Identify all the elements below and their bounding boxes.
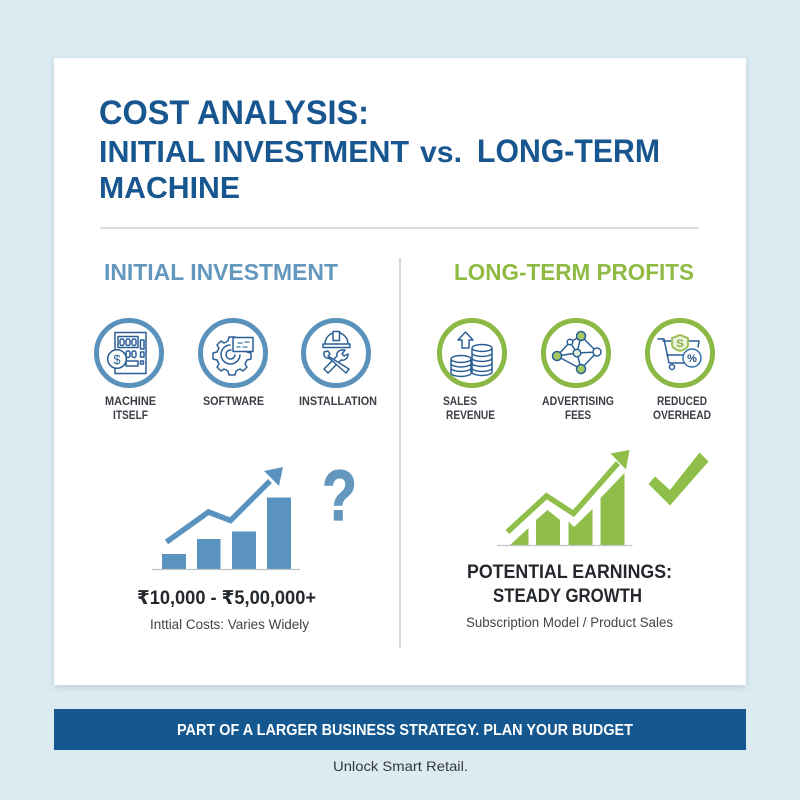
cost range: ₹10,000 - ₹5,00,000+ bbox=[137, 588, 316, 609]
heading: initial investment: INITIAL INVESTMENT bbox=[104, 259, 338, 285]
label: advertising fees: FEES bbox=[565, 410, 591, 422]
label: sales revenue: SALES bbox=[443, 396, 477, 408]
label: machine itself: MACHINE bbox=[105, 396, 156, 408]
earnings note: Subscription Model / Product Sales bbox=[466, 615, 673, 630]
icon: installation bbox=[304, 320, 368, 386]
icon: question mark: ? bbox=[322, 457, 357, 536]
icon: advertising fees bbox=[544, 320, 608, 386]
icon: software bbox=[200, 320, 266, 386]
title: vs. bbox=[420, 136, 462, 169]
potential earnings: STEADY GROWTH bbox=[493, 586, 642, 607]
label: reduced overhead: REDUCED bbox=[657, 396, 707, 408]
icon: check mark bbox=[648, 452, 708, 506]
label: advertising fees: ADVERTISING bbox=[542, 396, 614, 408]
title: LONG-TERM bbox=[477, 133, 660, 169]
title: MACHINE bbox=[99, 170, 240, 205]
title: INITIAL INVESTMENT bbox=[99, 134, 409, 169]
label: installation: INSTALLATION bbox=[299, 396, 377, 408]
icon: reduced overhead: S bbox=[676, 338, 684, 350]
tagline: Unlock Smart Retail. bbox=[333, 758, 468, 774]
title bbox=[99, 94, 660, 205]
heading: long-term profits: LONG-TERM PROFITS bbox=[454, 259, 694, 285]
panel: main card bbox=[54, 58, 746, 685]
title: COST ANALYSIS: bbox=[99, 94, 369, 132]
label: machine itself: ITSELF bbox=[113, 410, 148, 422]
label: reduced overhead: OVERHEAD bbox=[653, 410, 711, 422]
cost note: Inttial Costs: Varies Widely bbox=[150, 617, 309, 632]
chart: rising costs bbox=[152, 467, 300, 570]
label: sales revenue: REVENUE bbox=[446, 410, 495, 422]
icon: machine itself: $ bbox=[113, 352, 121, 367]
label: software: SOFTWARE bbox=[203, 396, 264, 408]
label: sales revenue bbox=[443, 396, 495, 422]
potential earnings: POTENTIAL EARNINGS: bbox=[467, 562, 672, 583]
icon: sales revenue bbox=[440, 320, 504, 386]
label: advertising fees bbox=[542, 396, 614, 422]
banner bbox=[54, 709, 746, 750]
label: machine itself bbox=[105, 396, 156, 422]
banner: PART OF A LARGER BUSINESS STRATEGY. PLAN YOUR BUDGET bbox=[177, 722, 633, 739]
icon: reduced overhead: % bbox=[687, 353, 697, 365]
chart: steady growth bbox=[497, 450, 632, 546]
icon: reduced overhead bbox=[648, 320, 712, 386]
icon: machine itself bbox=[96, 320, 162, 386]
label: reduced overhead bbox=[653, 396, 711, 422]
potential earnings bbox=[467, 562, 672, 607]
